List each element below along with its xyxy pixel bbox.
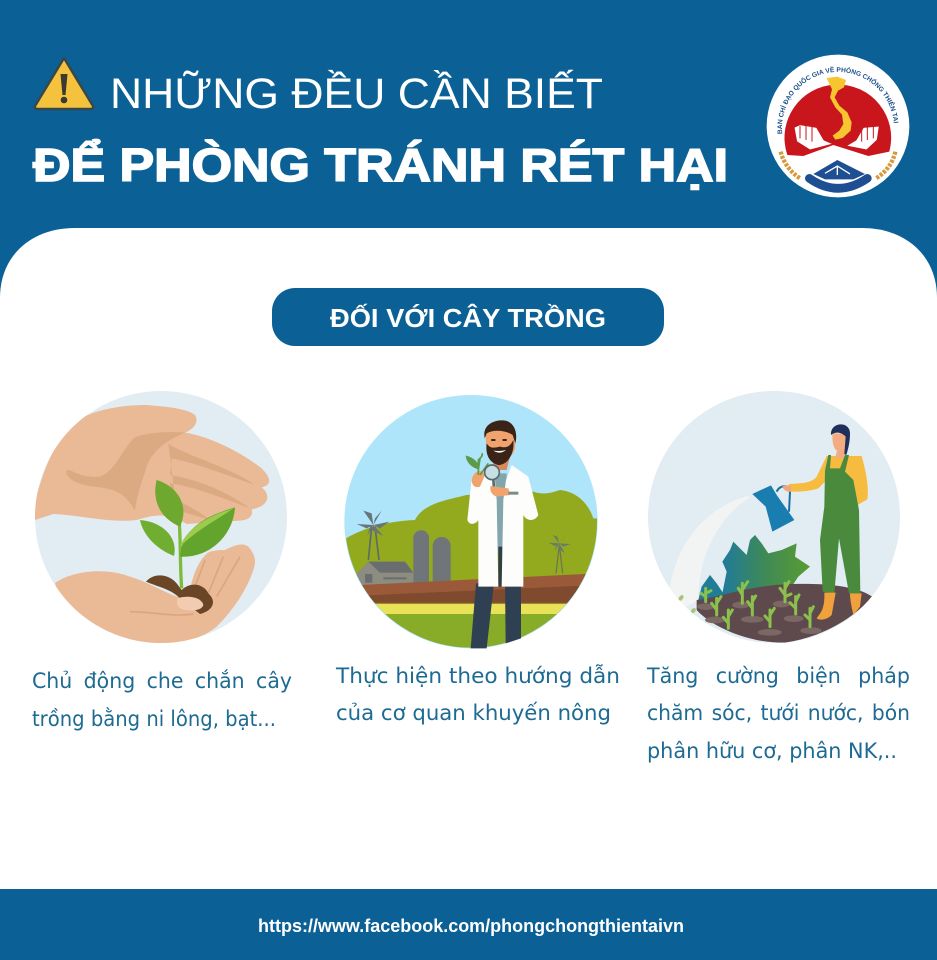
caption 1 — [32, 669, 292, 731]
right windmill — [548, 535, 571, 573]
lower hand — [55, 545, 255, 644]
logo mountain — [813, 160, 865, 179]
overalls — [820, 455, 860, 593]
caption 2 line 2: của cơ quan khuyến nông — [336, 701, 611, 725]
green field — [385, 614, 557, 648]
caption 3 line 3: phân hữu cơ, phân NK,.. — [647, 739, 897, 763]
footer band — [0, 889, 937, 960]
header band — [0, 0, 937, 300]
caption 1 line 2: trồng bằng ni lông, bạt... — [32, 707, 276, 731]
neck and face — [832, 433, 848, 458]
hair — [484, 420, 516, 443]
shirt — [493, 473, 507, 553]
magnifying glass — [485, 465, 499, 488]
left windmill — [357, 511, 389, 560]
head — [485, 426, 516, 460]
white content panel — [0, 228, 937, 889]
footer url: https://www.facebook.com/phongchongthientaivn — [258, 916, 684, 936]
eyes — [492, 437, 506, 443]
logo wheat right — [876, 152, 895, 178]
bushes — [722, 535, 810, 600]
logo wheat left — [781, 152, 800, 178]
illustration: agricultural scientist on a farm — [340, 395, 603, 651]
watering can — [752, 485, 794, 532]
lab coat — [467, 465, 538, 587]
thumb — [177, 597, 203, 611]
icon: warning triangle — [35, 58, 93, 109]
seed mounds — [697, 601, 822, 636]
hills — [340, 490, 603, 620]
logo: national steering committee emblem — [766, 54, 910, 198]
circle background — [648, 391, 900, 643]
caption 2 — [335, 663, 620, 725]
barn — [357, 562, 413, 585]
soil mound — [697, 584, 872, 643]
caption 1 line 1: Chủ động che chắn cây — [32, 669, 292, 693]
circle background — [35, 391, 287, 643]
hand and plant — [472, 471, 485, 487]
caption 3 line 2: chăm sóc, tưới nước, bón — [647, 701, 910, 725]
upper hand — [30, 405, 269, 644]
silos — [413, 530, 451, 583]
logo red field — [784, 84, 891, 156]
title line 1: NHỮNG ĐỀU CẦN BIẾT — [110, 70, 603, 118]
legs — [471, 583, 521, 648]
title line 2: ĐỂ PHÒNG TRÁNH RÉT HẠI — [33, 139, 728, 191]
yellow crop strip — [376, 604, 566, 614]
seedling — [140, 480, 235, 588]
right hand — [490, 486, 510, 497]
sky circle — [344, 395, 598, 648]
section heading: ĐỐI VỚI CÂY TRỒNG — [330, 303, 606, 333]
neck — [492, 457, 510, 470]
logo disc — [767, 55, 909, 197]
soil — [146, 575, 213, 614]
scientist — [467, 420, 538, 648]
logo hands — [794, 125, 879, 150]
logo map of Vietnam — [827, 77, 852, 140]
water stream — [670, 496, 750, 613]
caption 3 line 1: Tăng cường biện pháp — [646, 664, 910, 688]
illustration: hands protecting a seedling — [30, 391, 287, 644]
boots — [817, 593, 862, 620]
beard — [486, 440, 514, 465]
farmer — [782, 424, 868, 620]
section pill — [272, 288, 664, 346]
water drops — [678, 595, 696, 614]
seedlings — [701, 582, 813, 628]
hands — [782, 485, 848, 513]
logo circular caption: BAN CHỈ ĐẠO QUỐC GIA VỀ PHÒNG CHỐNG THIÊN TAI — [777, 66, 898, 134]
illustration: farmer watering seedlings — [648, 391, 900, 643]
hair — [831, 424, 850, 455]
caption 3 — [646, 664, 910, 763]
brown field — [362, 574, 586, 604]
caption 2 line 1: Thực hiện theo hướng dẫn — [335, 663, 620, 688]
sweater and arms — [789, 456, 868, 513]
logo gear — [809, 178, 867, 188]
